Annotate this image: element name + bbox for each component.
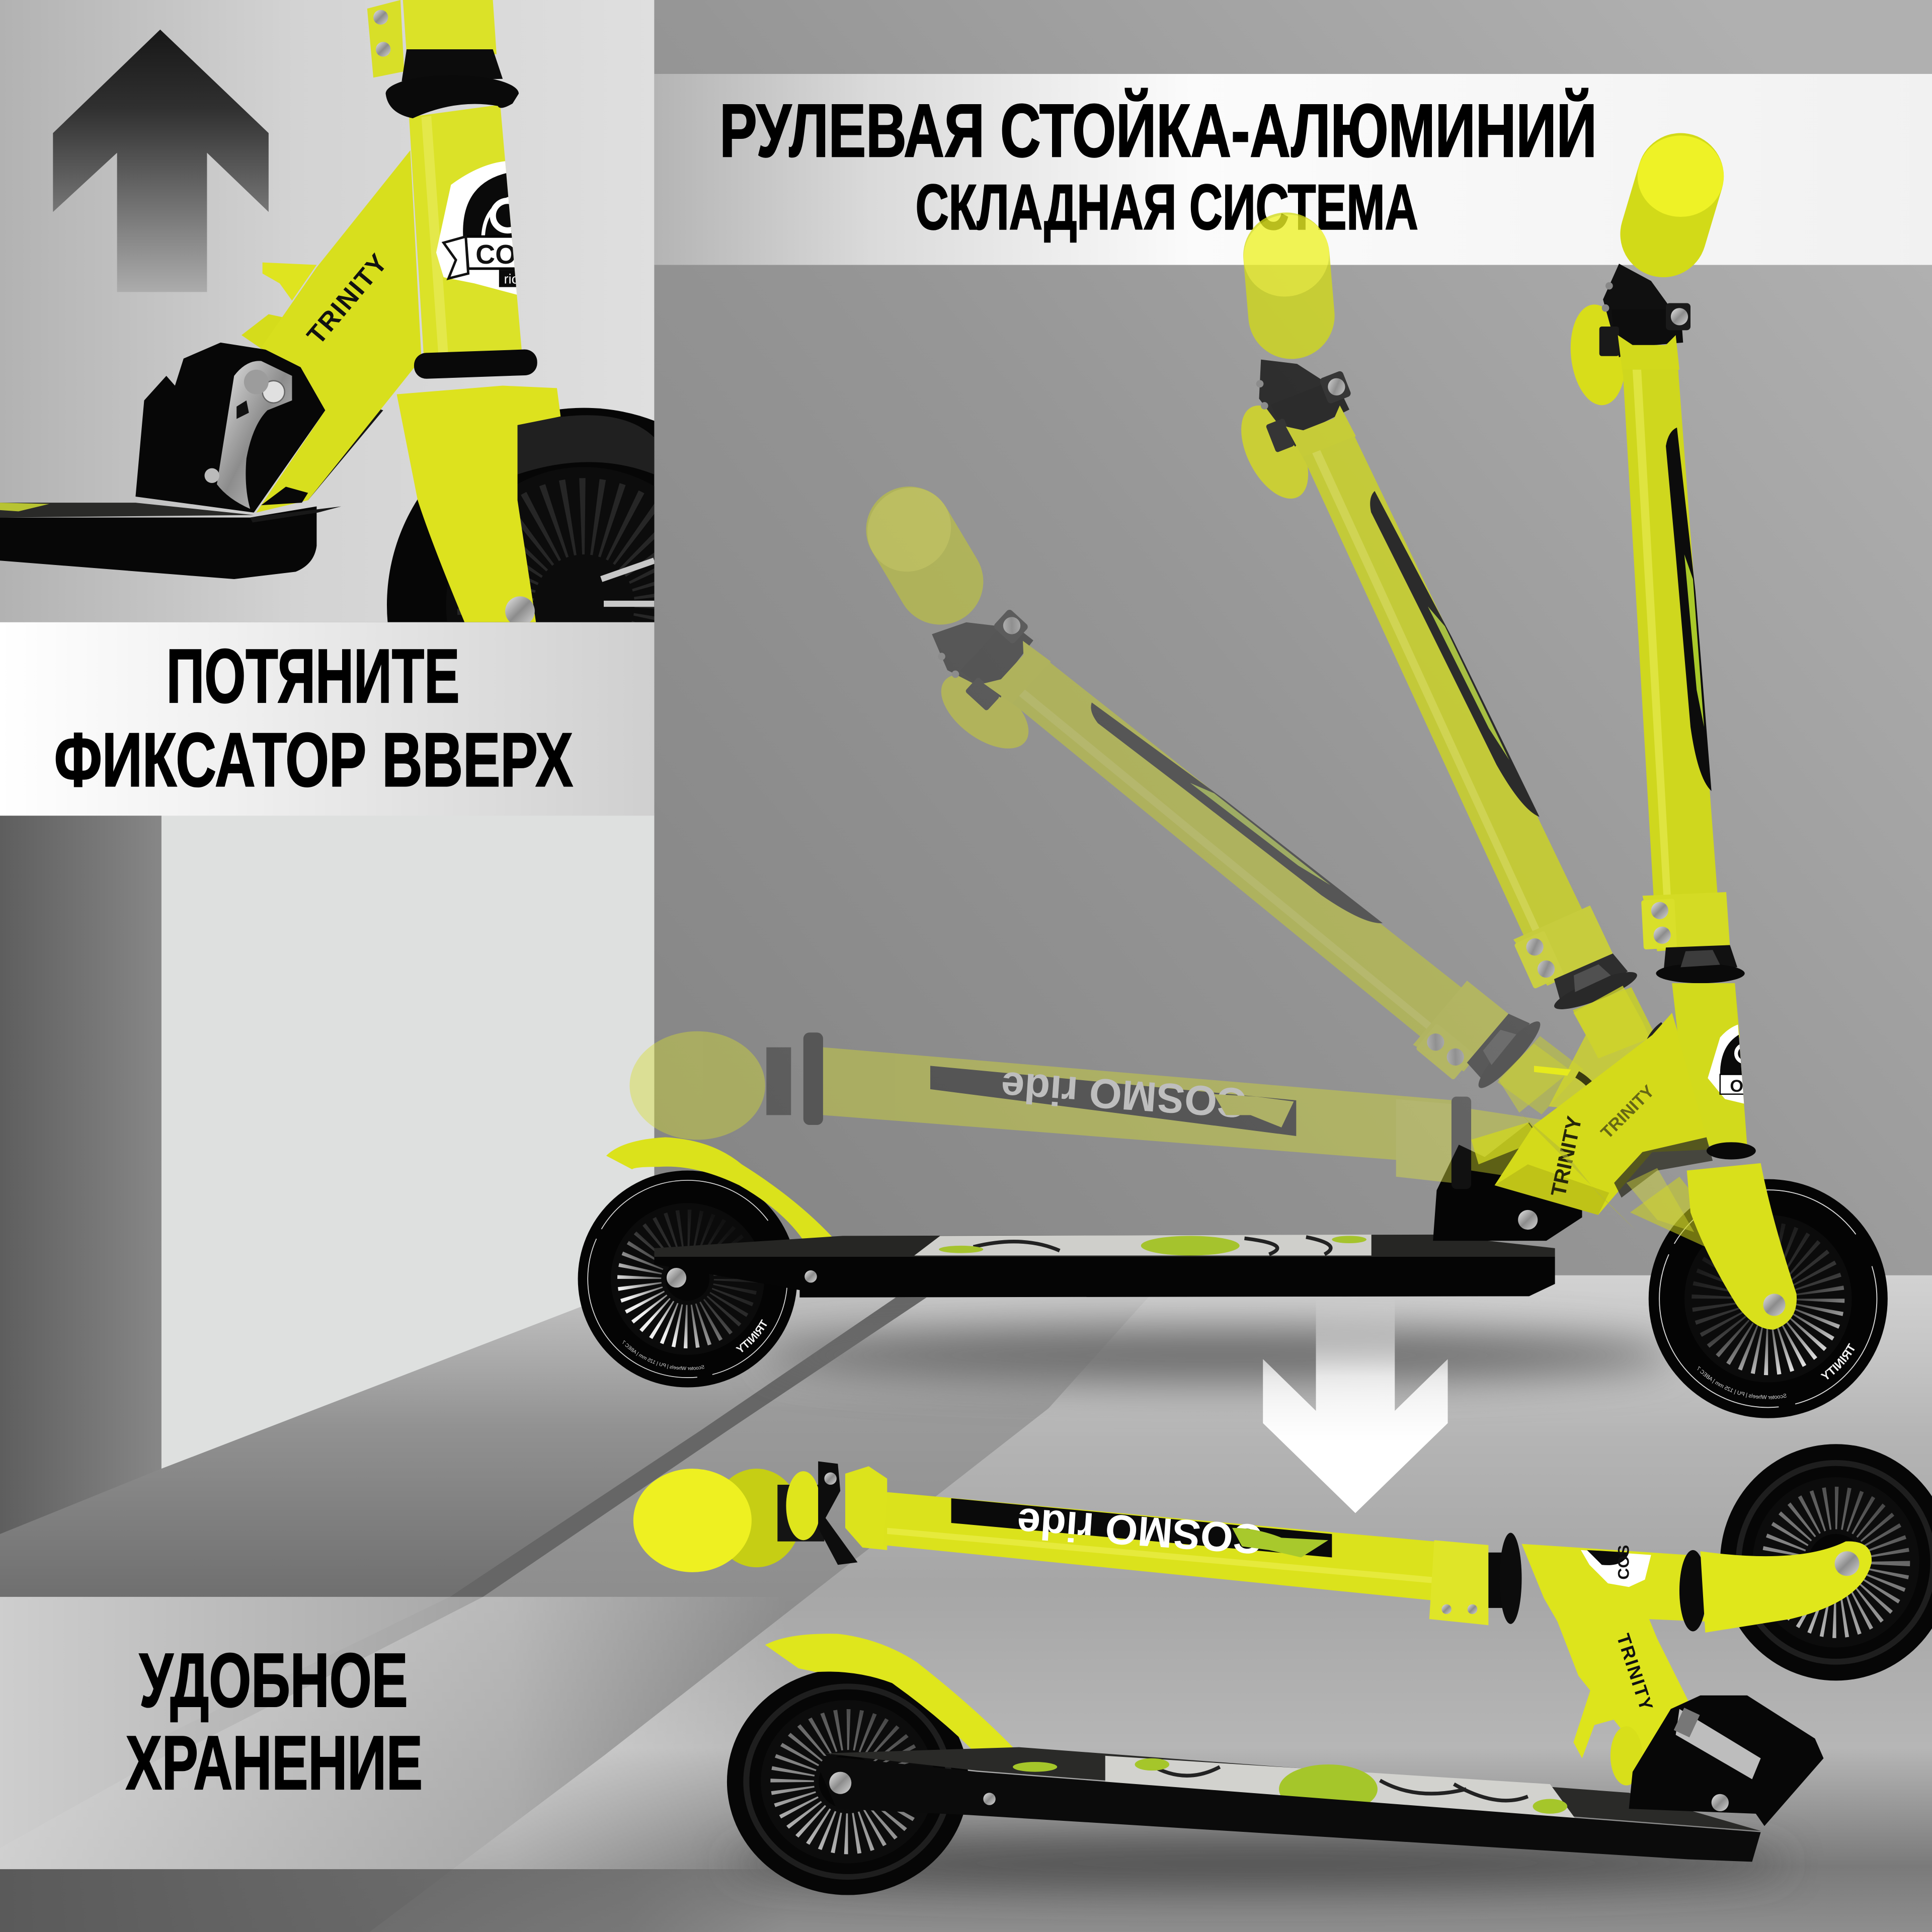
close-up brand label: TRINITY	[301, 248, 393, 350]
deck body	[654, 1257, 1555, 1298]
ghost black ring band	[1614, 1137, 1713, 1197]
shadow under main scooter	[764, 1328, 1676, 1383]
folded front wheel	[1720, 1444, 1932, 1680]
close-up black plate	[135, 343, 326, 513]
upright stem	[1566, 135, 1745, 1037]
folded deck body	[820, 1756, 1761, 1862]
deck wavy pattern	[974, 1237, 1331, 1254]
ghost sticker: stage 2	[1645, 1025, 1679, 1094]
lower head ring	[1707, 1142, 1756, 1159]
close-up deck	[0, 503, 341, 579]
folded deck wavy pattern	[1146, 1762, 1528, 1801]
bottom banner	[0, 1597, 788, 1869]
scooter deck	[654, 1235, 1555, 1298]
close-up logo sticker	[436, 161, 534, 298]
heading: pull the latch up: ПОТЯНИТЕ	[167, 634, 459, 719]
ghost TRINITY labels: TRINITY	[1546, 1114, 1586, 1198]
ghost sticker: stage 2: O	[1656, 1078, 1666, 1093]
folded logo sticker	[1581, 1545, 1651, 1587]
folded head tube	[1521, 1544, 1705, 1622]
folded collar	[845, 1466, 887, 1550]
folded lower ring	[1679, 1550, 1707, 1631]
close-up latch lever	[205, 361, 292, 509]
deck rear bolts	[667, 1268, 686, 1287]
folded brand label: TRINITY	[1613, 1631, 1657, 1714]
folded neck bar	[777, 1485, 824, 1542]
close-up tube	[409, 105, 522, 359]
folded deck grip	[824, 1747, 1761, 1831]
folded rear grip	[786, 1471, 821, 1540]
head logo sticker: OM	[1730, 1077, 1758, 1096]
close-up lower ring	[414, 349, 538, 379]
folded deck green splash	[1013, 1758, 1567, 1814]
floor diagonal stripe	[135, 1298, 927, 1750]
folded fork	[1701, 1542, 1872, 1633]
ghost fork layers	[1630, 1177, 1748, 1264]
folded rear tab	[1573, 1689, 1617, 1758]
floor zone: middle	[0, 1276, 1201, 1932]
close-up bracket with bolts	[367, 0, 404, 77]
folded hinge bracket	[1629, 1696, 1823, 1826]
ghost necks and forks: TRINITY	[1597, 1082, 1658, 1143]
left dark column	[0, 813, 162, 1577]
folded lower tab	[1611, 1726, 1642, 1786]
icon: up arrow	[53, 30, 269, 292]
top right banner	[654, 74, 1932, 265]
folded sleeve	[1429, 1540, 1488, 1625]
floor zone: left	[0, 1276, 936, 1932]
heading: pull the latch up: ФИКСАТОР ВВЕРХ	[54, 717, 573, 802]
close-up logo sticker: rio	[504, 271, 519, 286]
scooter rear fender	[606, 1137, 839, 1248]
folded latch lever	[1674, 1708, 1761, 1811]
ghost sticker: stage 3	[1577, 1075, 1622, 1134]
folded scooter	[633, 1444, 1932, 1895]
heading: convenient storage: УДОБНОЕ	[139, 1638, 408, 1723]
gray wall background	[654, 0, 1932, 1281]
folded logo sticker: COS	[1615, 1545, 1633, 1580]
heading: convenient storage: ХРАНЕНИЕ	[126, 1721, 423, 1806]
ghost position: horizontal stem	[629, 1031, 1553, 1189]
close-up top tube	[403, 0, 497, 54]
ghost necks and forks	[1471, 986, 1748, 1264]
shadow under folded scooter	[727, 1841, 1787, 1885]
close-up rear bar	[308, 410, 383, 500]
scooter hinge bracket	[1433, 1122, 1582, 1241]
folded grip	[712, 1469, 801, 1567]
folded deck graphic panel	[1105, 1756, 1577, 1821]
folded tube green splash	[1232, 1528, 1328, 1558]
floor zone: right	[370, 1275, 1932, 1932]
folded nut ring	[1488, 1533, 1521, 1624]
heading: steering column: СКЛАДНАЯ СИСТЕМА	[916, 172, 1418, 243]
close-up fork	[397, 386, 560, 626]
folded tube	[883, 1492, 1434, 1600]
folded tube black strip	[951, 1498, 1332, 1558]
folded deck bolts	[829, 1772, 851, 1794]
head logo sticker	[1708, 1022, 1758, 1106]
scooter rear wheel	[578, 1171, 797, 1388]
heading: pull the latch up	[54, 634, 573, 802]
close-up logo sticker: COS	[475, 239, 534, 270]
heading: steering column	[719, 88, 1597, 243]
heading: convenient storage	[126, 1638, 423, 1806]
close-up hook tab	[263, 263, 316, 301]
bottom dark band	[0, 1869, 788, 1932]
hinge bolt	[1518, 1210, 1538, 1230]
folded neck	[1544, 1598, 1694, 1762]
deck grip tape	[654, 1235, 1555, 1257]
panel: latch close-up photo	[0, 0, 654, 622]
folded rear wheel	[727, 1668, 969, 1895]
head tube	[1672, 983, 1747, 1146]
deck graphic panel	[914, 1235, 1372, 1256]
ghost head: stage 3	[1498, 1043, 1571, 1112]
heading: steering column: РУЛЕВАЯ СТОЙКА-АЛЮМИНИЙ	[719, 88, 1597, 173]
close-up lower tab	[242, 314, 286, 351]
scooter fork	[1687, 1163, 1797, 1330]
ghost head: stage 2	[1549, 986, 1652, 1112]
main neck	[1495, 1013, 1709, 1215]
neck shaded fold	[1495, 1164, 1609, 1215]
folded rear fender	[765, 1634, 1019, 1764]
left banner	[0, 622, 654, 816]
icon: down arrow	[1263, 1298, 1448, 1513]
scooter front wheel	[1649, 1179, 1888, 1418]
left light wall	[162, 813, 654, 1503]
ghost position: stem at 52 degrees	[801, 455, 1586, 1197]
close-up steering nut	[386, 49, 519, 118]
deck green splash	[1141, 1236, 1240, 1256]
close-up neck	[256, 150, 422, 513]
folded clamp	[818, 1461, 857, 1565]
floor background	[0, 1275, 1932, 1932]
folded tube text: COSMO ride	[1015, 1499, 1265, 1563]
ghost position: stem at 26 degrees	[1165, 194, 1660, 1099]
close-up front wheel	[386, 408, 654, 622]
ghost hook bar	[1534, 1066, 1571, 1076]
ghost position: horizontal stem: COSMO ride	[999, 1063, 1249, 1127]
ghost bracket top	[1471, 1122, 1540, 1164]
